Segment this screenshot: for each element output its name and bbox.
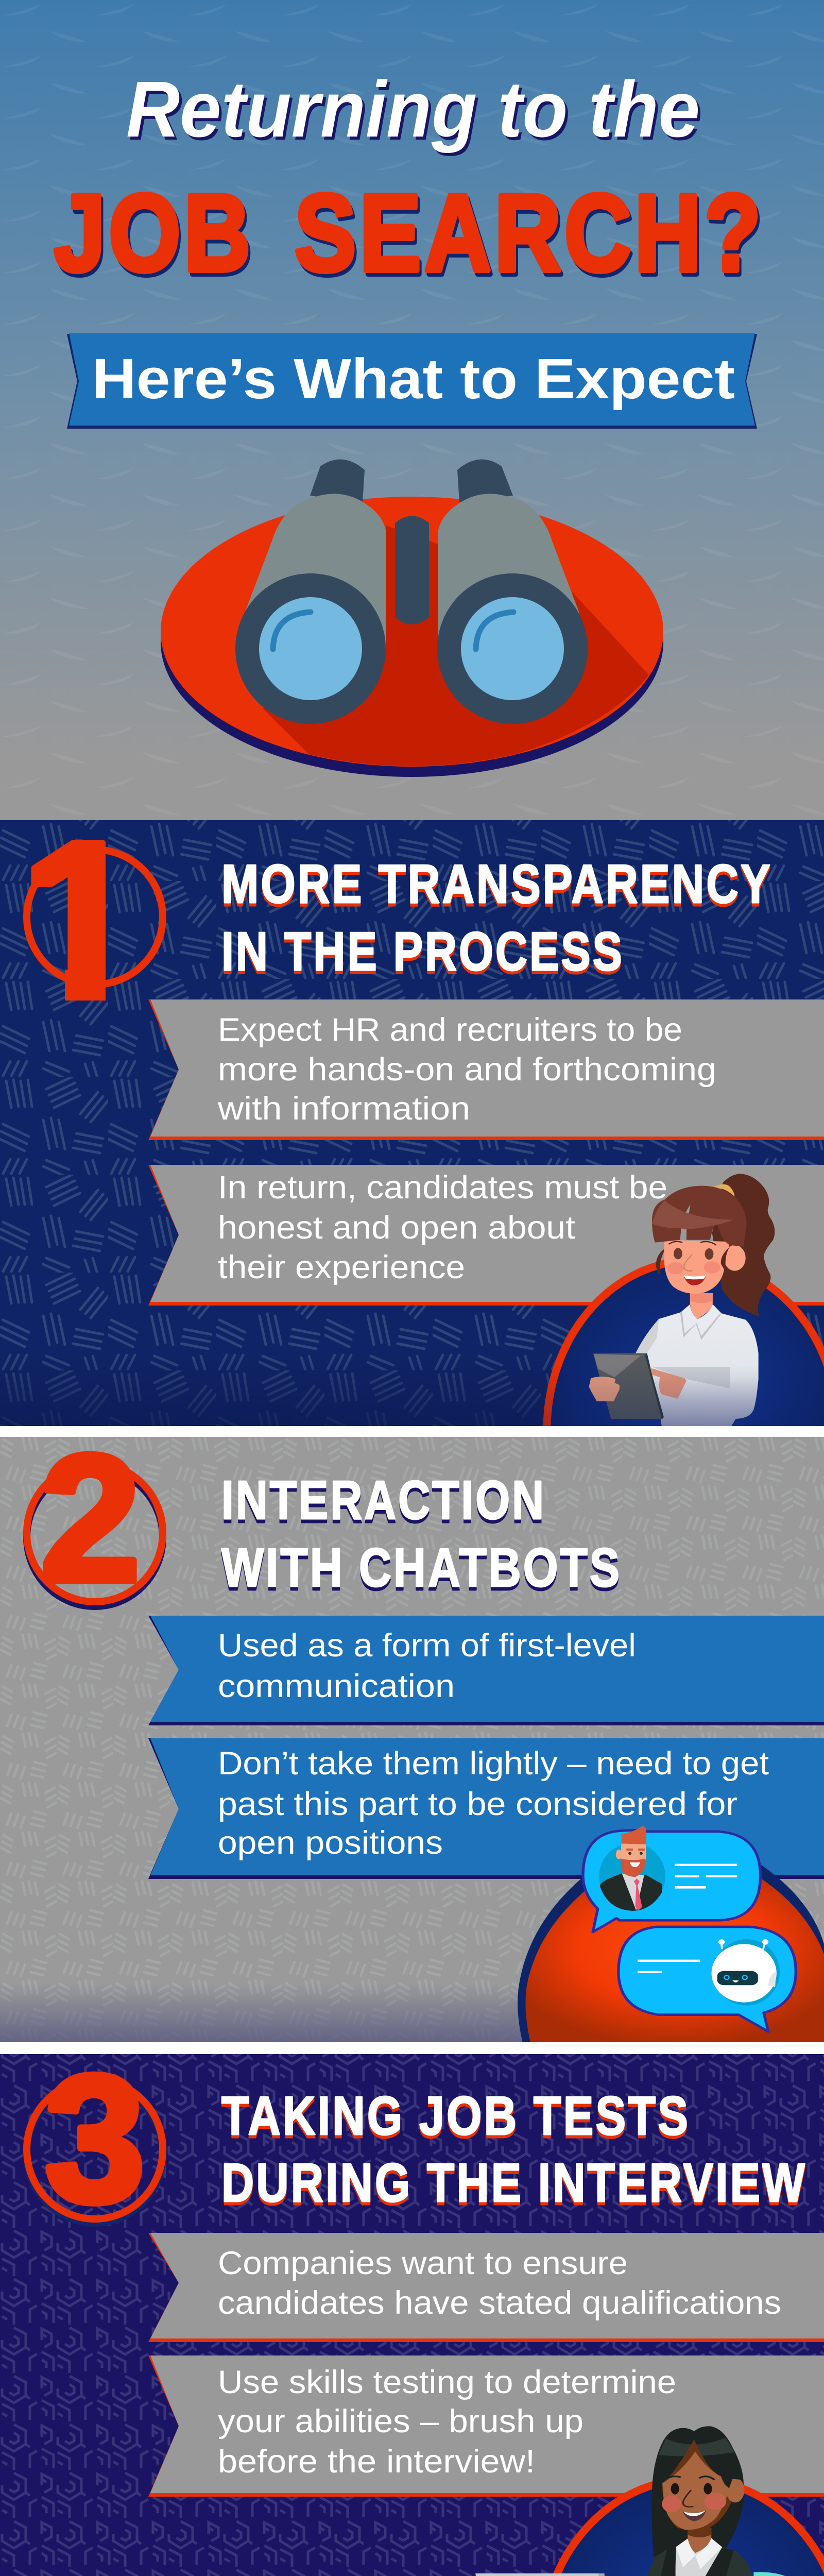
banner: skills testing: before the interview!	[218, 2444, 535, 2480]
banner: Here's What to Expect	[67, 333, 757, 429]
banner: in return: honest and open about	[218, 1210, 576, 1246]
banner: skills testing	[148, 2355, 824, 2497]
banner: qualifications: Companies want to ensure	[218, 2245, 628, 2281]
banner: qualifications: candidates have stated qualifications	[218, 2285, 781, 2321]
heading	[221, 2086, 807, 2213]
illustration: woman with tablet	[543, 1174, 824, 1426]
heading	[224, 863, 770, 975]
header panel background	[0, 0, 824, 820]
banner: do not take lightly: past this part to be considered for	[218, 1786, 737, 1822]
heading: WITH CHATBOTS	[221, 1537, 622, 1598]
number ring 1	[27, 850, 163, 985]
title: JOB SEARCH?: JOB	[54, 172, 254, 294]
banner: in return: their experience	[218, 1249, 465, 1285]
title: Returning to the: Returning to the	[126, 65, 700, 154]
panel: 1 more transparency	[0, 820, 824, 1426]
heading: TAKING JOB TESTS	[221, 2086, 690, 2146]
number 1: 1	[20, 796, 143, 1044]
illustration: chat bubbles	[518, 1825, 824, 2044]
panel: 3 taking job tests	[0, 2038, 824, 2576]
banner: qualifications	[148, 2233, 824, 2342]
heading: IN THE PROCESS	[221, 921, 624, 982]
banner: in return: In return, candidates must be	[218, 1170, 667, 1206]
icon: binoculars on red ellipse	[161, 460, 663, 777]
heading	[220, 1480, 619, 1591]
banner: expect HR	[148, 999, 824, 1140]
heading: INTERACTION	[221, 1470, 546, 1531]
number ring 2	[27, 1464, 163, 1606]
banner: first-level: communication	[218, 1668, 455, 1704]
laptop	[475, 2573, 660, 2576]
banner: do not take lightly	[148, 1738, 824, 1879]
banner: do not take lightly: open positions	[218, 1825, 443, 1861]
banner: expect HR: more hands-on and forthcoming	[218, 1052, 716, 1088]
number 2: 2	[40, 1418, 141, 1619]
illustration: woman at laptop	[475, 2426, 824, 2576]
banner: first-level	[148, 1616, 824, 1725]
banner: expect HR: Expect HR and recruiters to be	[218, 1012, 682, 1048]
banner: Here's What to Expect: Here’s What to Expect	[92, 347, 735, 411]
banner: in return	[148, 1165, 824, 1306]
banner: do not take lightly: Don’t take them lightly – need to get	[218, 1745, 769, 1782]
number ring 3	[27, 2080, 163, 2223]
title: JOB SEARCH?	[54, 172, 764, 294]
banner: skills testing: your abilities – brush up	[218, 2403, 583, 2439]
banner: skills testing: Use skills testing to determine	[218, 2364, 676, 2400]
number 3: 3	[45, 2038, 145, 2240]
panel: 2 interaction with chatbots	[0, 1418, 824, 2044]
banner: expect HR: with information	[217, 1091, 470, 1127]
chat bubble: person	[583, 1825, 760, 1932]
chat bubble: robot	[619, 1927, 796, 2031]
banner: first-level: Used as a form of first-level	[218, 1628, 636, 1664]
